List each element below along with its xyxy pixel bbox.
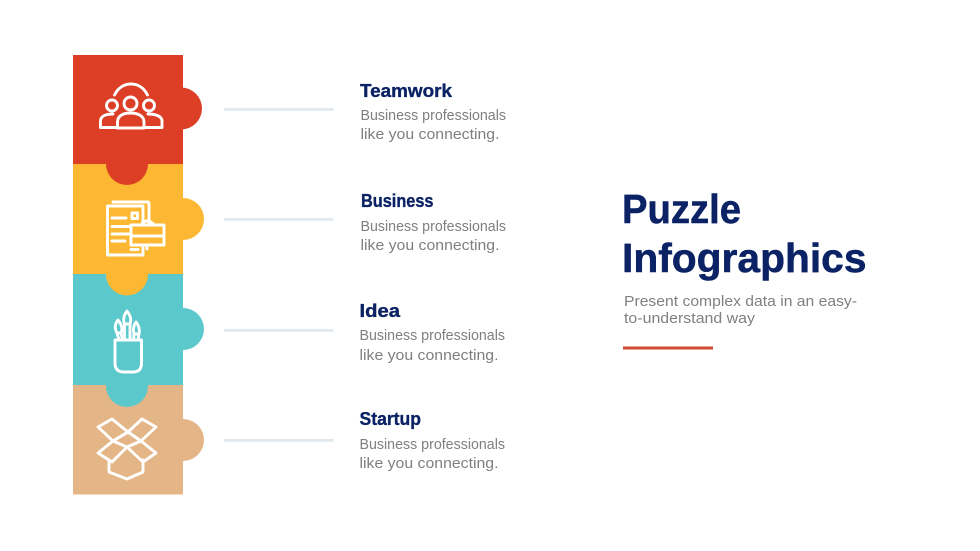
text block: teamwork: like you connecting.	[360, 126, 500, 143]
puzzle column	[73, 55, 204, 494]
text block: idea: Business professionals	[360, 327, 505, 344]
icon: open box	[98, 419, 156, 479]
text block: business: like you connecting.	[360, 237, 500, 254]
text block: startup	[360, 408, 505, 472]
puzzle piece: idea	[73, 274, 204, 407]
text block: teamwork: Teamwork	[360, 80, 453, 101]
text block: startup: like you connecting.	[360, 455, 498, 472]
title	[622, 186, 866, 281]
text block: idea	[360, 300, 505, 364]
text block: business: Business professionals	[360, 218, 506, 235]
text block: idea: like you connecting.	[360, 347, 498, 364]
text block: idea: Idea	[360, 300, 401, 321]
title: Puzzle	[622, 186, 741, 232]
text block: startup: Business professionals	[360, 436, 505, 453]
puzzle piece: business	[73, 164, 204, 296]
icon: brushes in a cup	[115, 311, 142, 372]
text block: business: Business	[361, 190, 434, 211]
text block: teamwork	[360, 80, 506, 143]
connector lines	[224, 108, 334, 442]
subtitle: to-understand way	[624, 310, 756, 327]
text block: teamwork: Business professionals	[360, 107, 506, 124]
text block: startup: Startup	[360, 408, 421, 429]
icon: document and briefcase	[108, 202, 164, 255]
puzzle piece: startup	[73, 385, 204, 494]
text block: business	[360, 190, 506, 254]
subtitle	[624, 293, 857, 327]
accent underline	[623, 346, 713, 350]
icon: team of people	[100, 84, 162, 128]
subtitle: Present complex data in an easy-	[624, 293, 857, 310]
title: Infographics	[622, 235, 866, 281]
puzzle piece: teamwork	[73, 55, 202, 185]
